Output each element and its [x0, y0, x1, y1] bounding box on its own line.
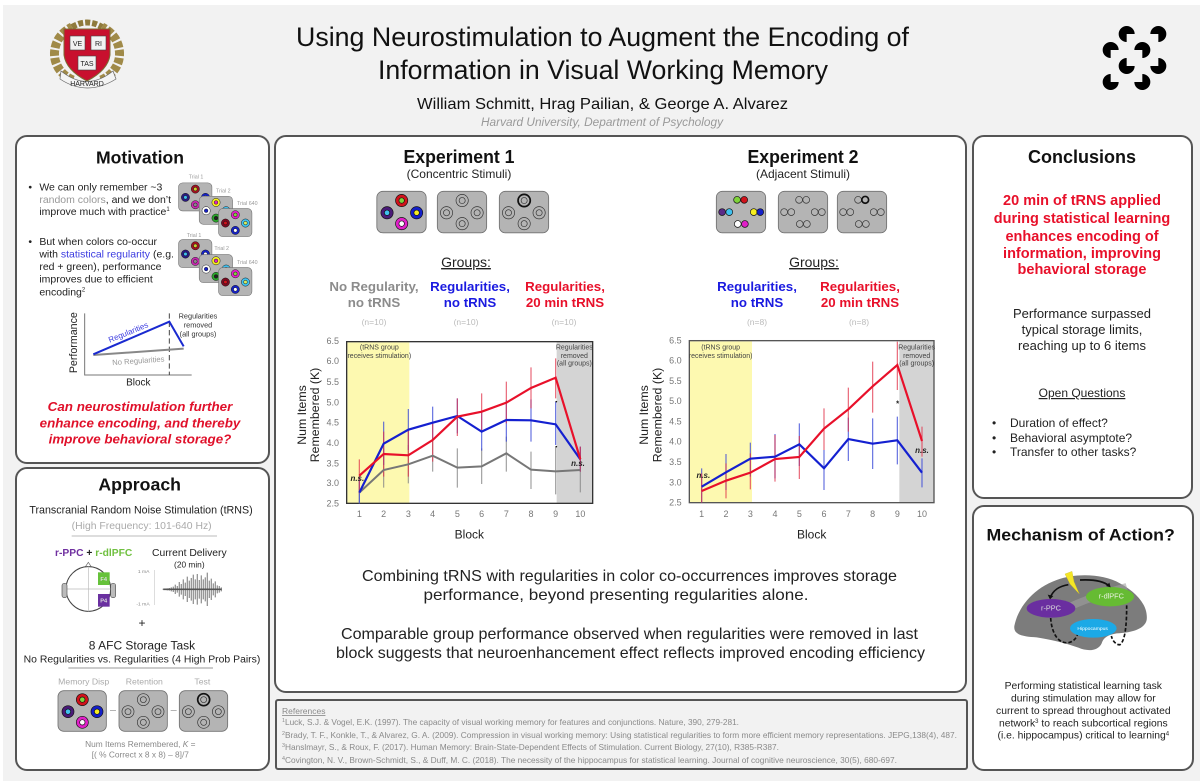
bullet text: statistical regularity: with statistical regularity (e.g. [38, 250, 174, 261]
text: mechanism explanation: network [999, 718, 1035, 729]
line chart: experiment 2: 8 [870, 509, 875, 519]
callout: main finding: during statistical learning [994, 211, 1170, 227]
heading: mechanism: Mechanism of Action? [986, 526, 1175, 545]
groups: experiment 1: (n=10) [454, 317, 479, 327]
groups: experiment 1: Groups: [441, 254, 491, 270]
line chart: experiment 2: 6.5 [669, 335, 682, 345]
groups: experiment 1 [329, 254, 605, 327]
diagram: brain network: r-PPC [1041, 603, 1062, 612]
line chart: experiment 2: 3.5 [669, 457, 682, 467]
text: performance: reaching up to 6 items [1018, 338, 1146, 353]
line chart: experiment 1: receives stimulation) [347, 353, 411, 360]
text: target regions: r-PPC + r-dlPFC [55, 548, 132, 559]
line chart: experiment 1: 2 [381, 509, 386, 519]
text: open questions [992, 386, 1137, 459]
heading: experiment 1: Experiment 1 [404, 147, 514, 167]
chart: current waveform [136, 569, 222, 607]
icon: head with electrodes: P4 [100, 599, 108, 605]
diagram: brain network: Hippocampus [1077, 626, 1108, 632]
task sequence: memory display, retention, test [58, 676, 228, 731]
bullet text: statistical regularity: 2 [82, 287, 86, 293]
groups: experiment 1: 20 min tRNS [526, 295, 604, 310]
groups: experiment 1: No Regularity, [329, 279, 419, 294]
line chart: experiment 2: * [896, 400, 900, 409]
trial stack: random [179, 175, 258, 237]
line chart: experiment 1: n.s. [350, 474, 364, 483]
trial stack: random: Trial 2 [216, 188, 231, 194]
line chart: experiment 1: 4.0 [326, 438, 339, 448]
line chart: experiment 1: removed [561, 353, 588, 360]
diagram: brain network: r-dlPFC [1099, 592, 1125, 601]
line chart: performance schematic: removed [184, 320, 212, 329]
text: tRNS: Transcranial Random Noise Stimulation (tRNS) [29, 505, 253, 517]
text: storage task: No Regularities vs. Regularities (4 High Prob Pairs) [24, 654, 260, 665]
plus sign: + [138, 616, 145, 630]
text: open questions: Duration of effect? [1010, 416, 1108, 430]
line chart: experiment 1: 1 [357, 509, 362, 519]
text block: results summary: block suggests that neuroenhancement effect reflects improved encoding efficiency [336, 645, 925, 662]
line chart: experiment 2: 5 [797, 509, 802, 519]
panel: references: 1 [282, 718, 285, 724]
authors: William Schmitt, Hrag Pailian, & George A. Alvarez [417, 96, 788, 113]
bullet text: random colors: improve much with practice [39, 207, 166, 218]
text: open questions: • [992, 416, 996, 430]
groups: experiment 2: Regularities, [820, 279, 900, 294]
text block: results summary [336, 568, 925, 662]
line chart: experiment 2: removed [903, 353, 930, 360]
line chart: experiment 2: 7 [846, 509, 851, 519]
line chart: performance schematic: Regularities [179, 311, 218, 320]
panel: conclusions [973, 136, 1192, 498]
panel: references: 2 [282, 731, 285, 737]
diagram: brain network [1014, 571, 1147, 650]
text: mechanism explanation: current to spread throughout activated [996, 706, 1171, 717]
task sequence: memory display, retention, test: Retention [126, 676, 163, 686]
groups: experiment 1: Regularities, [430, 279, 510, 294]
text block: results summary: Comparable group performance observed when regularities were removed in last [341, 626, 919, 643]
panel: references: Covington, N. V., Brown-Schmidt, S., & Duff, M. C. (2018). The necessity of the hippocampus for statistical learning. Journal of cognitive neuroscience, 30(5), 680-697. [285, 755, 897, 765]
line chart: experiment 1 [295, 336, 593, 542]
text: storage task: 8 AFC Storage Task [89, 638, 196, 652]
line chart: experiment 1: 6 [479, 509, 484, 519]
line chart: experiment 1: 5 [455, 509, 460, 519]
groups: experiment 1: no tRNS [348, 295, 400, 310]
panel: references: References [282, 706, 325, 716]
groups: experiment 2: (n=8) [849, 317, 869, 327]
chart: current waveform: 1 mA [138, 569, 150, 575]
line chart: experiment 1: Num Items [295, 385, 309, 445]
icon: head with electrodes: F4 [100, 577, 108, 583]
text: tRNS: (High Frequency: 101-640 Hz) [72, 521, 212, 532]
icon: head with electrodes [62, 562, 116, 611]
text: current delivery: (20 min) [174, 559, 205, 569]
text: mechanism explanation: to reach subcortical regions [1039, 718, 1168, 729]
bullet text: statistical regularity [28, 237, 174, 298]
trial stack: random: Trial 640 [237, 201, 258, 207]
text: current delivery: Current Delivery [152, 548, 227, 559]
line chart: experiment 1: (tRNS group [360, 345, 399, 352]
bullet text: random colors [28, 183, 171, 218]
stimuli: concentric [377, 191, 549, 233]
line chart: experiment 1: 5.5 [326, 377, 339, 387]
line chart: experiment 2: (all groups) [899, 361, 934, 368]
groups: experiment 2: (n=8) [747, 317, 767, 327]
line chart: experiment 1: Remembered (K) [308, 368, 322, 462]
line chart: experiment 1: 3 [406, 509, 411, 519]
line chart: experiment 2: 1 [699, 509, 704, 519]
trial stack: regular: Trial 2 [214, 246, 229, 252]
groups: experiment 1: (n=10) [552, 317, 577, 327]
text: performance [1013, 306, 1151, 353]
heading: conclusions: Conclusions [1028, 147, 1136, 167]
stimuli: adjacent [716, 191, 887, 233]
line chart: experiment 2: (tRNS group [701, 345, 740, 352]
line chart: experiment 2 [637, 335, 936, 542]
bullet text: statistical regularity: encoding [39, 287, 82, 298]
panel: references [276, 700, 967, 769]
line chart: experiment 2: 5.0 [669, 396, 682, 406]
callout: research question [40, 399, 241, 446]
trial stack: regular: Trial 1 [187, 233, 201, 239]
title: Information in Visual Working Memory [378, 55, 828, 85]
line chart: experiment 1: 10 [575, 509, 585, 519]
callout: research question: improve behavioral storage? [49, 431, 231, 446]
callout: main finding: information, improving [1003, 246, 1161, 262]
line chart: experiment 1: 9 [553, 509, 558, 519]
text: open questions: Open Questions [1039, 386, 1125, 400]
line chart: experiment 1: 4 [430, 509, 435, 519]
logo: Harvard crest: TAS [80, 61, 94, 68]
line chart: experiment 1: 8 [528, 509, 533, 519]
text block: results summary: performance, beyond presenting regularities alone. [424, 587, 808, 604]
panel: experiments [275, 136, 966, 692]
bullet text: random colors: We can only remember ~3 [39, 183, 163, 194]
callout: main finding: enhances encoding of [1005, 229, 1159, 245]
groups: experiment 2: Regularities, [717, 279, 797, 294]
text: performance: typical storage limits, [1022, 322, 1142, 337]
bullet text: statistical regularity: improves due to efficient [39, 274, 153, 285]
line chart: experiment 2: n.s. [696, 471, 710, 480]
task sequence: memory display, retention, test: Memory Disp [58, 676, 109, 686]
line chart: experiment 1: 3.0 [326, 478, 339, 488]
panel: references: 4 [282, 756, 285, 762]
text: storage task [24, 638, 260, 668]
bullet text: statistical regularity: But when colors co-occur [39, 237, 158, 248]
panel: motivation [16, 136, 269, 463]
panel: references: Hanslmayr, S., & Roux, F. (2017). Human Memory: Brain-State-Dependent Effects of Stimulation. Current Biology, 27(10), R385-R387. [285, 742, 779, 752]
logo: Harvard crest: RI [95, 41, 102, 48]
line chart: experiment 2: 6.0 [669, 356, 682, 366]
heading: experiment 2: Experiment 2 [748, 147, 858, 167]
line chart: experiment 2: 10 [917, 509, 927, 519]
line chart: experiment 2: Num Items [637, 385, 651, 445]
text: open questions: Transfer to other tasks? [1010, 445, 1137, 459]
trial stack: random: Trial 1 [189, 175, 203, 181]
logo: Harvard crest [54, 22, 120, 88]
line chart: experiment 2: Regularities [898, 345, 936, 352]
heading: approach: Approach [98, 474, 181, 494]
groups: experiment 2 [717, 254, 900, 327]
line chart: experiment 2: 9 [895, 509, 900, 519]
line chart: experiment 1: (all groups) [557, 361, 592, 368]
text: mechanism explanation: 4 [1166, 731, 1170, 737]
text: open questions: Behavioral asymptote? [1010, 431, 1132, 445]
line chart: experiment 2: 4 [772, 509, 777, 519]
line chart: experiment 2: 5.5 [669, 376, 682, 386]
trial stack: regular: Trial 640 [237, 260, 258, 266]
formula: [( % Correct x 8 x 8) – 8]/7 [92, 750, 189, 760]
bullet text: random colors: • [28, 183, 32, 194]
line chart: experiment 1: 6.0 [326, 356, 339, 366]
text: current delivery [152, 548, 227, 569]
heading: experiment 1 [404, 147, 514, 181]
line chart: experiment 1: 2.5 [326, 498, 339, 508]
task sequence: memory display, retention, test: Test [194, 676, 211, 686]
groups: experiment 1: no tRNS [444, 295, 496, 310]
bullet text: random colors: 1 [166, 207, 170, 213]
line chart: performance schematic: No Regularities [112, 355, 165, 367]
text: tRNS [29, 505, 253, 536]
panel: references: 3 [282, 743, 285, 749]
panel: references: Luck, S.J. & Vogel, E.K. (1997). The capacity of visual working memory for features and conjunctions. Nature, 390, 279-281. [285, 717, 739, 727]
text block: results summary: Combining tRNS with regularities in color co-occurrences improves storage [362, 568, 897, 585]
text: open questions: • [992, 445, 996, 459]
line chart: experiment 2: receives stimulation) [689, 353, 753, 360]
groups: experiment 2: 20 min tRNS [821, 295, 899, 310]
line chart: experiment 2: 3.0 [669, 477, 682, 487]
text: performance: Performance surpassed [1013, 306, 1151, 321]
line chart: performance schematic: Performance [68, 312, 80, 373]
callout: main finding: behavioral storage [1018, 262, 1146, 278]
callout: research question: enhance encoding, and thereby [40, 415, 241, 430]
heading: experiment 2: (Adjacent Stimuli) [756, 167, 850, 181]
callout: main finding: 20 min of tRNS applied [1003, 193, 1161, 209]
groups: experiment 2: Groups: [789, 254, 839, 270]
line chart: experiment 2: n.s. [915, 446, 929, 455]
groups: experiment 1: (n=10) [362, 317, 387, 327]
bullet text: random colors: random colors, and we don’t [39, 195, 171, 206]
panel: approach [16, 468, 269, 770]
text: mechanism explanation: (i.e. hippocampus) critical to learning [998, 731, 1166, 742]
line chart: experiment 2: 4.5 [669, 416, 682, 426]
groups: experiment 2: no tRNS [731, 295, 783, 310]
line chart: performance schematic: (all groups) [180, 330, 216, 339]
callout: main finding [994, 193, 1170, 278]
line chart: experiment 2: 6 [821, 509, 826, 519]
line chart: experiment 2: Block [797, 528, 827, 542]
panel: mechanism of action [973, 506, 1193, 770]
chart: current waveform: -1 mA [136, 601, 150, 607]
line chart: performance schematic: Regularities [107, 320, 150, 345]
logo: Harvard crest: VE [73, 41, 82, 48]
line chart: experiment 1: Regularities [556, 345, 593, 352]
logo: Kanizsa cube [1103, 26, 1166, 90]
line chart: experiment 2: 4.0 [669, 436, 682, 446]
line chart: experiment 1: 6.5 [326, 336, 339, 346]
formula: Num Items Remembered, K = [85, 739, 196, 749]
heading: motivation: Motivation [96, 147, 184, 167]
line chart: experiment 1: Block [455, 528, 485, 542]
groups: experiment 1: Regularities, [525, 279, 605, 294]
trial stack: regular [179, 233, 258, 296]
title: Using Neurostimulation to Augment the Encoding of [296, 22, 909, 52]
callout: research question: Can neurostimulation further [48, 399, 233, 414]
line chart: experiment 2: 2.5 [669, 497, 682, 507]
affiliation: Harvard University, Department of Psychology [481, 117, 724, 129]
text: open questions: • [992, 431, 996, 445]
line chart: experiment 1: n.s. [571, 459, 585, 468]
title [296, 22, 909, 85]
text: mechanism explanation [996, 681, 1171, 742]
line chart: performance schematic: Block [126, 377, 151, 388]
formula [85, 739, 196, 760]
heading: experiment 1: (Concentric Stimuli) [407, 167, 511, 181]
line chart: experiment 1: 4.5 [326, 418, 339, 428]
panel: references: Brady, T. F., Konkle, T., & Alvarez, G. A. (2009). Compression in visual working memory: Using statistical regularities to form more efficient memory representations. JEPG,138(4), 487. [285, 730, 957, 740]
text: mechanism explanation: Performing statistical learning task [1005, 681, 1163, 692]
line chart: experiment 2: 2 [723, 509, 728, 519]
logo: Harvard crest: HARVARD [70, 81, 104, 88]
heading: experiment 2 [748, 147, 858, 181]
text: mechanism explanation: 3 [1035, 719, 1039, 725]
line chart: experiment 2: 3 [748, 509, 753, 519]
text: mechanism explanation: during stimulation may allow for [1011, 693, 1156, 704]
line chart: experiment 2: Remembered (K) [651, 368, 665, 462]
line chart: performance schematic [68, 311, 218, 388]
line chart: experiment 1: 7 [504, 509, 509, 519]
line chart: experiment 1: 5.0 [326, 397, 339, 407]
bullet text: statistical regularity: red + green), performance [39, 262, 162, 273]
bullet text: statistical regularity: • [28, 237, 32, 248]
line chart: experiment 1: 3.5 [326, 458, 339, 468]
